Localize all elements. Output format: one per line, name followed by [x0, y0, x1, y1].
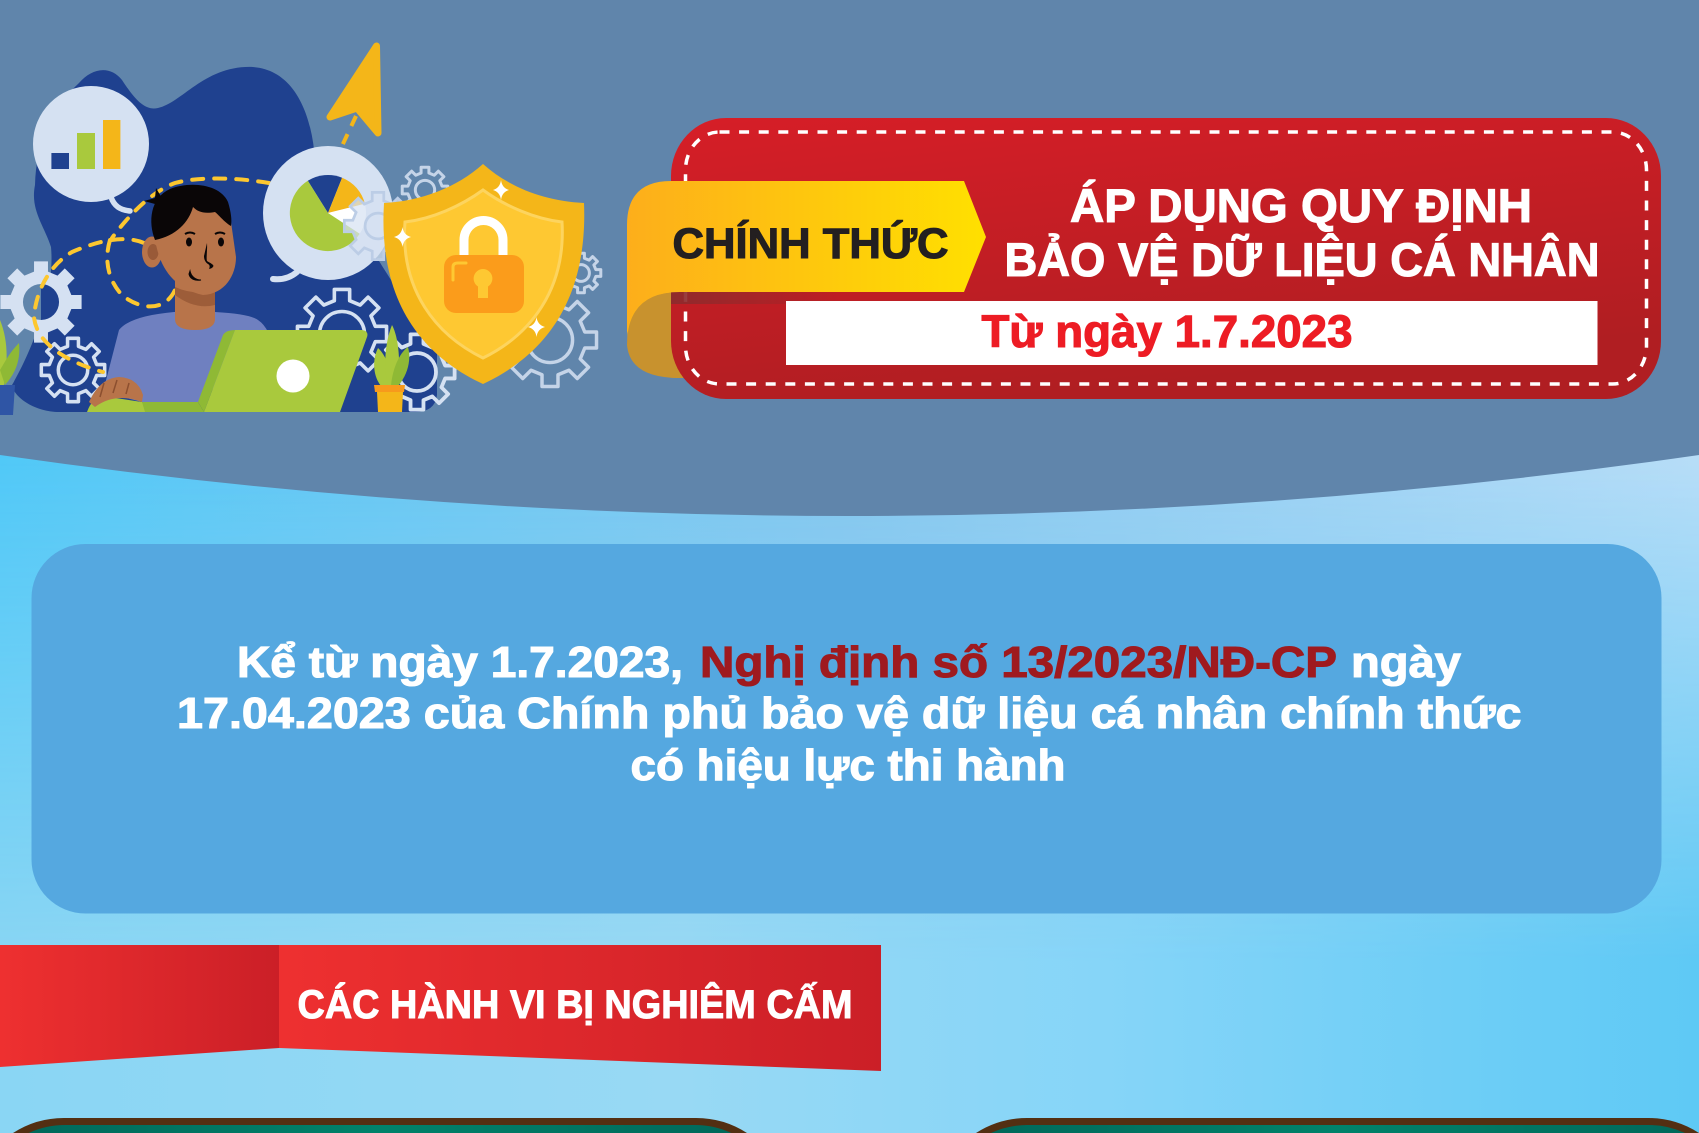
heading line 1: ÁP DỤNG QUY ĐỊNH: [1070, 179, 1532, 232]
intro text: Nghị định số 13/2023/NĐ-CP: [700, 638, 1337, 687]
heading line 2: BẢO VỆ DỮ LIỆU CÁ NHÂN: [1004, 233, 1600, 286]
security shield: [383, 164, 584, 384]
gear cluster on blob: [41, 289, 455, 410]
intro text: Kể từ ngày 1.7.2023,: [237, 638, 683, 687]
dark blue blob: [12, 67, 437, 412]
section heading: CÁC HÀNH VI BỊ NGHIÊM CẤM: [298, 981, 852, 1027]
pie chart speech bubble: [263, 146, 412, 280]
green laptop: [142, 330, 367, 412]
padlock: [444, 220, 524, 313]
illustration: person with data and security icons: [0, 46, 601, 415]
left card top: [13, 1118, 747, 1133]
sparkles: [394, 180, 545, 337]
intro text: [177, 638, 1522, 790]
potted plant right: [374, 325, 409, 412]
section ribbon: [0, 945, 881, 1071]
potted plant left: [0, 320, 19, 415]
shirt: [103, 312, 268, 402]
bar chart speech bubble: [33, 86, 149, 211]
intro panel: [32, 544, 1662, 914]
cursor arrow: [330, 46, 378, 146]
folded ribbon back: [627, 200, 700, 378]
date box: Từ ngày 1.7.2023: [982, 306, 1352, 357]
header band with curved bottom: [0, 0, 1699, 516]
date box: [786, 301, 1598, 365]
intro text: ngày: [1351, 638, 1462, 687]
title badge: [627, 118, 1661, 399]
tag label: CHÍNH THỨC: [672, 219, 948, 268]
ribbon shadow: [671, 292, 841, 304]
hair: [151, 185, 231, 240]
white stitched dashes: [686, 132, 1646, 384]
intro text: có hiệu lực thi hành: [630, 741, 1066, 790]
person at laptop: [87, 185, 268, 412]
right card top: [976, 1118, 1699, 1133]
pale background gears: [402, 167, 601, 387]
intro text: 17.04.2023 của Chính phủ bảo vệ dữ liệu cá nhân chính thức: [177, 689, 1522, 738]
yellow dashed connector lines: [34, 178, 269, 372]
yellow tag: [627, 181, 986, 340]
red rounded panel: [671, 118, 1661, 399]
head: [155, 200, 236, 295]
background gradient: [0, 455, 1699, 1133]
solid white gear: [0, 261, 82, 343]
